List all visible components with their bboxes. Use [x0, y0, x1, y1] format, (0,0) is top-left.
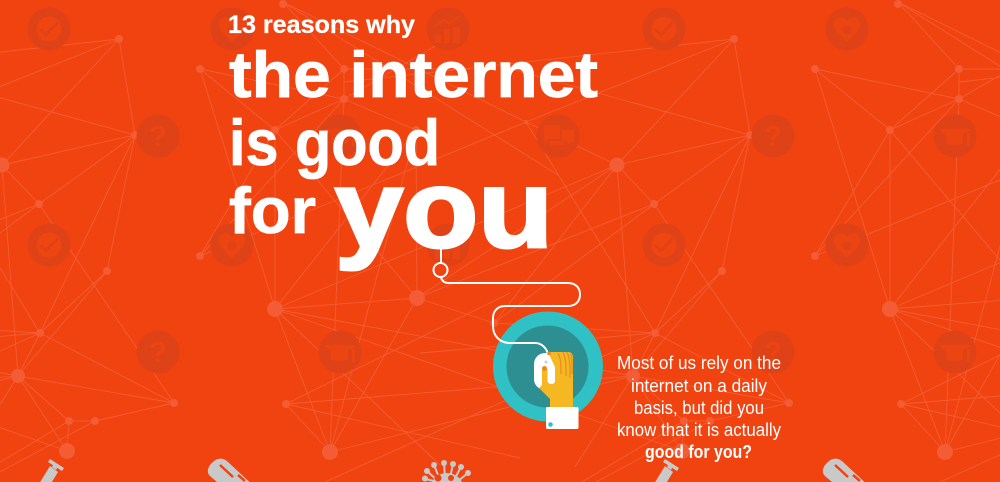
icon: virus: [422, 460, 471, 482]
background icons: [28, 8, 976, 374]
teal circle: [493, 312, 603, 422]
heading: you: you: [335, 148, 553, 271]
subtitle line: 13 reasons why: [228, 11, 415, 39]
title: [228, 11, 598, 271]
text block: internet on a daily: [631, 376, 767, 396]
finger lines: [558, 352, 572, 378]
hand: [539, 352, 573, 408]
text block: know that it is actually: [617, 420, 781, 440]
cable: [441, 248, 580, 354]
icon: syringe: [40, 459, 679, 482]
text block: good for you?: [645, 442, 752, 462]
text block: Most of us rely on the: [617, 353, 781, 373]
heading line 3: for: [229, 174, 316, 247]
text block: [617, 353, 781, 462]
illustration: mouse and hand: [434, 248, 603, 429]
cuff: [546, 407, 578, 429]
heading line 2: is good: [229, 106, 440, 179]
icon: pill: [208, 459, 864, 482]
text block: basis, but did you: [634, 398, 764, 418]
mouse body: [534, 353, 558, 390]
heading line 1: the internet: [229, 38, 598, 111]
